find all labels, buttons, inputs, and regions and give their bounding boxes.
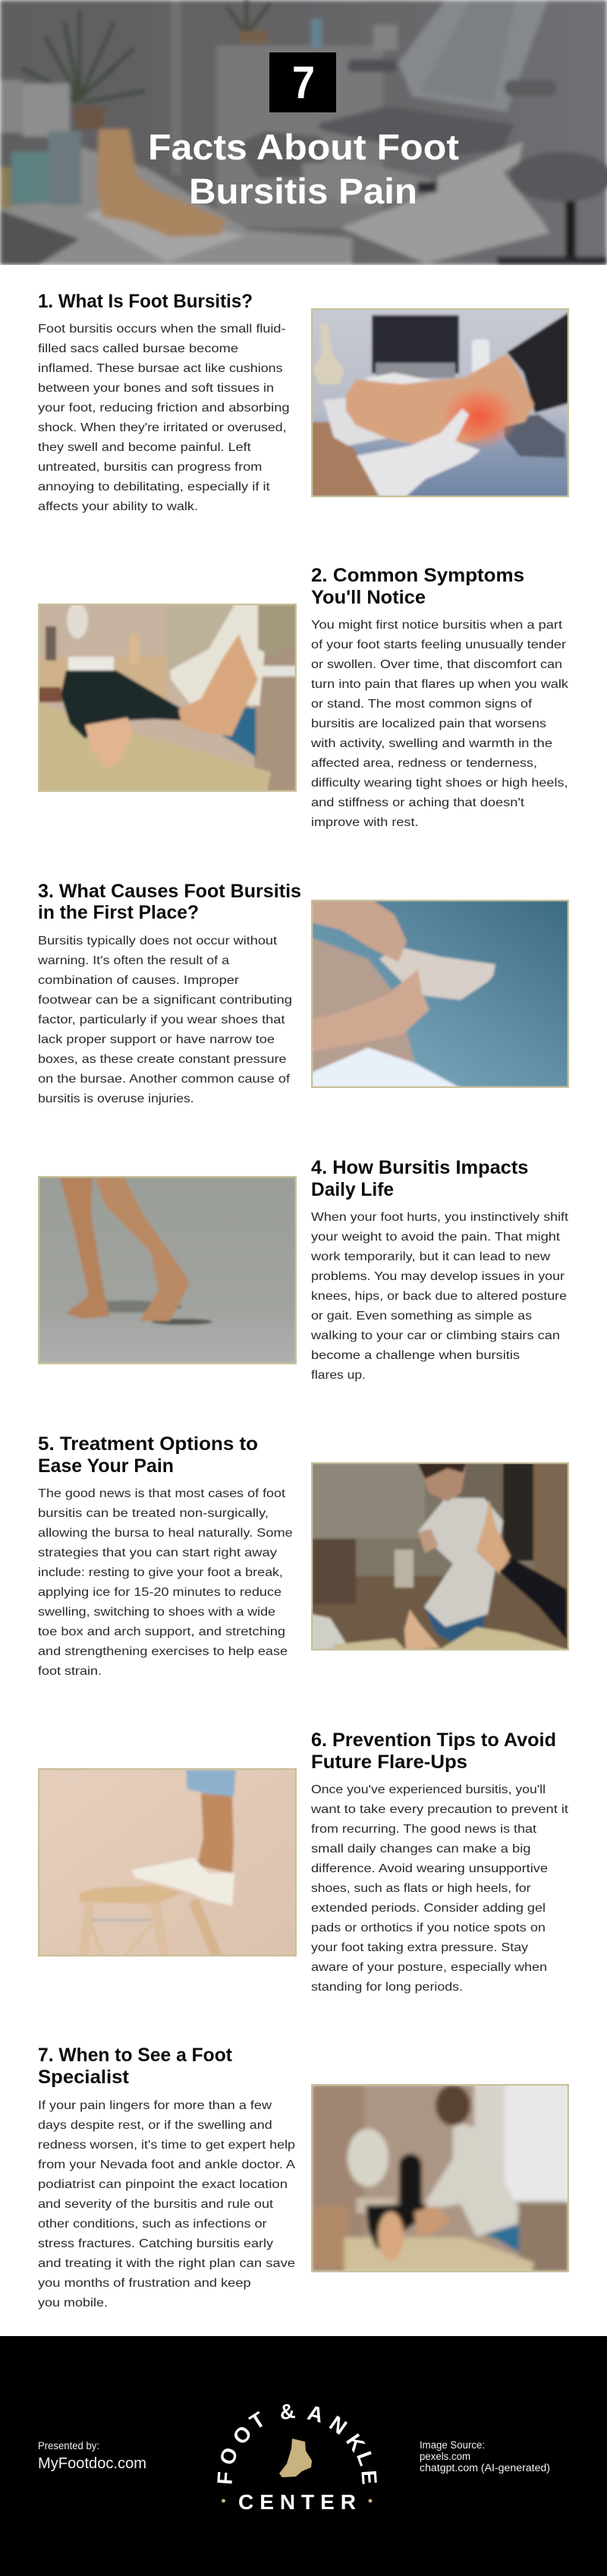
text block 3: warning. It's often the result of a bbox=[37, 954, 229, 967]
text block 1: filled sacs called bursae become bbox=[38, 342, 238, 355]
text block 6: your foot taking extra pressure. Stay bbox=[311, 1941, 528, 1954]
text block 7: If your pain lingers for more than a few bbox=[38, 2099, 272, 2112]
text block 1 bbox=[38, 323, 290, 513]
text block 5: The good news is that most cases of foot bbox=[38, 1487, 286, 1500]
panel: 5. treatment options bbox=[38, 1433, 569, 1678]
heading 6 bbox=[311, 1729, 556, 1773]
photo: gloved hands examining heel bbox=[311, 308, 569, 497]
title: Bursitis Pain bbox=[189, 171, 417, 211]
text block 7: redness worsen, it's time to get expert help bbox=[38, 2139, 295, 2152]
arched logo lettering: N bbox=[326, 2411, 351, 2439]
text block 6: small daily changes can make a big bbox=[311, 1843, 531, 1856]
text block 7: podiatrist can pinpoint the exact location bbox=[38, 2178, 288, 2191]
heading 7: Specialist bbox=[38, 2067, 130, 2088]
arched logo lettering: A bbox=[305, 2401, 326, 2427]
text block 2: bursitis are localized pain that worsens bbox=[311, 717, 546, 730]
text block 7 bbox=[38, 2099, 295, 2310]
text block 7: days despite rest, or if the swelling and bbox=[38, 2119, 272, 2132]
text block 2: with activity, swelling and warmth in the bbox=[310, 737, 552, 750]
photo: bare legs walking on tiptoe bbox=[38, 1176, 297, 1364]
text block 5: toe box and arch support, and stretching bbox=[38, 1625, 285, 1638]
number badge bbox=[269, 52, 336, 112]
text block 3 bbox=[37, 935, 292, 1105]
header photo: podiatry clinic room bbox=[0, 0, 607, 265]
presented by bbox=[38, 2440, 146, 2472]
text block 5: foot strain. bbox=[38, 1665, 102, 1678]
heading 5 bbox=[38, 1433, 258, 1477]
text block 1: inflamed. These bursae act like cushions bbox=[38, 362, 282, 375]
text block 6: Once you've experienced bursitis, you'll bbox=[311, 1783, 546, 1796]
text block 4: or gait. Even something as simple as bbox=[311, 1310, 532, 1323]
panel: 2. common symptoms bbox=[38, 565, 569, 829]
text block 7: stress fractures. Catching bursitis early bbox=[38, 2237, 273, 2250]
arched logo lettering: K bbox=[341, 2429, 370, 2455]
text block 3: Bursitis typically does not occur without bbox=[38, 935, 278, 947]
text block 2: of your foot starts feeling unusually tender bbox=[311, 638, 567, 651]
logo: foot and ankle center bbox=[212, 2399, 382, 2514]
text block 2: or stand. The most common signs of bbox=[311, 698, 533, 711]
text block 5: swelling, switching to shoes with a wide bbox=[38, 1606, 275, 1619]
arched logo lettering: O bbox=[215, 2444, 243, 2468]
text block 2: and stiffness or aching that doesn't bbox=[311, 796, 525, 809]
text block 7: you months of frustration and keep bbox=[38, 2277, 251, 2290]
text block 6 bbox=[310, 1783, 569, 1994]
panel: 3. what causes foot bursitis bbox=[37, 881, 569, 1105]
text block 6: pads or orthotics if you notice spots on bbox=[311, 1922, 546, 1934]
heading 6: Future Flare-Ups bbox=[311, 1751, 467, 1773]
text block 4: work temporarily, but it can lead to new bbox=[310, 1250, 550, 1263]
text block 4: knees, hips, or back due to altered posture bbox=[311, 1290, 567, 1303]
image source: chatgpt.com (AI-generated) bbox=[420, 2462, 550, 2474]
arched logo lettering: & bbox=[278, 2399, 297, 2424]
arched logo lettering: L bbox=[352, 2448, 379, 2469]
photo: hands pressing heel bbox=[311, 900, 569, 1088]
text block 1: between your bones and soft tissues in bbox=[38, 382, 274, 395]
text block 6: extended periods. Consider adding gel bbox=[311, 1902, 546, 1915]
heading 5: Ease Your Pain bbox=[38, 1455, 174, 1477]
text block 2: improve with rest. bbox=[311, 816, 419, 829]
text block 3: combination of causes. Improper bbox=[38, 974, 240, 987]
text block 3: lack proper support or have narrow toe bbox=[38, 1033, 275, 1046]
text block 3: bursitis is overuse injuries. bbox=[38, 1093, 194, 1105]
text block 2: turn into pain that flares up when you walk bbox=[311, 678, 569, 691]
text block 6: shoes, such as flats or high heels, for bbox=[311, 1882, 531, 1895]
heading 3: in the First Place? bbox=[38, 902, 199, 923]
text block 4: your weight to avoid the pain. That might bbox=[311, 1231, 561, 1244]
text block 2 bbox=[310, 619, 569, 829]
text block 4: become a challenge when bursitis bbox=[311, 1349, 520, 1362]
text block 2: difficulty wearing tight shoes or high heels, bbox=[311, 777, 568, 790]
text block 5 bbox=[38, 1487, 293, 1678]
text block 3: footwear can be a significant contributing bbox=[38, 994, 292, 1007]
text block 5: bursitis can be treated non-surgically, bbox=[38, 1507, 269, 1520]
image source: pexels.com bbox=[420, 2451, 470, 2462]
image source bbox=[420, 2439, 550, 2474]
text block 7: from your Nevada foot and ankle doctor. A bbox=[38, 2158, 295, 2171]
heading 6: 6. Prevention Tips to Avoid bbox=[311, 1729, 556, 1751]
text block 6: standing for long periods. bbox=[311, 1981, 463, 1994]
text block 4: flares up. bbox=[311, 1369, 366, 1382]
text block 3: on the bursae. Another common cause of bbox=[38, 1073, 291, 1086]
panel: 1. what is foot bursitis bbox=[38, 291, 569, 513]
text block 1: your foot, reducing friction and absorbing bbox=[38, 402, 290, 415]
text block 6: aware of your posture, especially when bbox=[311, 1961, 547, 1974]
text block 4 bbox=[310, 1211, 569, 1382]
text block 4: walking to your car or climbing stairs can bbox=[310, 1329, 560, 1342]
photo: practitioner treating patient on table bbox=[311, 2084, 569, 2272]
text block 5: allowing the bursa to heal naturally. Some bbox=[38, 1527, 293, 1540]
text block 6: difference. Avoid wearing unsupportive bbox=[311, 1862, 548, 1875]
text block 1: they swell and become painful. Left bbox=[38, 441, 251, 454]
heading 3: 3. What Causes Foot Bursitis bbox=[38, 881, 301, 902]
panel: 4. how bursitis impacts daily life bbox=[38, 1157, 569, 1382]
text block 3: factor, particularly if you wear shoes that bbox=[38, 1014, 285, 1026]
text block 7: and severity of the bursitis and rule out bbox=[38, 2198, 274, 2211]
heading 2 bbox=[311, 565, 524, 608]
header banner bbox=[0, 0, 607, 265]
text block 7: and treating it with the right plan can save bbox=[38, 2257, 295, 2270]
photo: therapist stretching patient's foot bbox=[311, 1462, 569, 1651]
text block 1: shock. When they're irritated or overused, bbox=[38, 421, 287, 434]
heading 7 bbox=[38, 2045, 233, 2088]
number badge: 7 bbox=[292, 57, 315, 108]
text block 7: other conditions, such as infections or bbox=[38, 2218, 267, 2231]
arched logo lettering: F bbox=[212, 2470, 237, 2486]
text block 5: applying ice for 15-20 minutes to reduce bbox=[38, 1586, 281, 1599]
text block 1: affects your ability to walk. bbox=[38, 500, 198, 513]
heading 1: 1. What Is Foot Bursitis? bbox=[38, 291, 253, 312]
title bbox=[148, 127, 459, 211]
arched logo lettering: T bbox=[246, 2407, 269, 2434]
panel: 6. prevention tips bbox=[38, 1729, 569, 1994]
icon: foot bbox=[279, 2439, 312, 2477]
photo: white shoe on wooden step stool bbox=[38, 1768, 297, 1956]
text block 5: include: resting to give your foot a break, bbox=[38, 1566, 283, 1579]
text block 2: You might first notice bursitis when a part bbox=[311, 619, 563, 632]
text block 3: boxes, as these create constant pressure bbox=[38, 1053, 287, 1066]
heading 2: You'll Notice bbox=[311, 587, 426, 608]
panel: 7. when to see a foot specialist bbox=[38, 2045, 569, 2310]
text block 6: from recurring. The good news is that bbox=[311, 1823, 537, 1836]
image source: Image Source: bbox=[420, 2439, 485, 2451]
arched logo lettering: E bbox=[357, 2470, 382, 2485]
text block 4: When your foot hurts, you instinctively shift bbox=[311, 1211, 569, 1224]
text block 1: Foot bursitis occurs when the small fluid- bbox=[38, 323, 285, 336]
arched logo lettering: O bbox=[228, 2421, 256, 2449]
text block 1: annoying to debilitating, especially if it bbox=[38, 481, 270, 493]
text block 2: affected area, redness or tenderness, bbox=[311, 757, 537, 770]
heading 4: 4. How Bursitis Impacts bbox=[311, 1157, 528, 1178]
heading 2: 2. Common Symptoms bbox=[311, 565, 524, 586]
photo: practitioner holding foot on treatment table bbox=[38, 604, 297, 792]
heading 4: Daily Life bbox=[311, 1179, 394, 1200]
logo word: center: CENTER bbox=[238, 2490, 356, 2514]
text block 1: untreated, bursitis can progress from bbox=[38, 461, 262, 474]
text block 5: and strengthening exercises to help ease bbox=[38, 1645, 288, 1658]
arched logo lettering bbox=[212, 2399, 382, 2486]
footer bbox=[0, 2336, 607, 2576]
heading 7: 7. When to See a Foot bbox=[38, 2045, 233, 2066]
heading 3 bbox=[38, 881, 301, 923]
presented by: MyFootdoc.com bbox=[38, 2455, 146, 2472]
text block 5: strategies that you can start right away bbox=[38, 1547, 277, 1559]
text block 4: problems. You may develop issues in your bbox=[311, 1270, 565, 1283]
text block 6: want to take every precaution to prevent it bbox=[310, 1803, 569, 1816]
presented by: Presented by: bbox=[38, 2440, 99, 2451]
text block 7: you mobile. bbox=[38, 2297, 108, 2310]
heading 5: 5. Treatment Options to bbox=[38, 1433, 258, 1455]
heading 4 bbox=[311, 1157, 528, 1200]
title: Facts About Foot bbox=[148, 127, 459, 167]
text block 2: or swollen. Over time, that discomfort can bbox=[311, 658, 562, 671]
